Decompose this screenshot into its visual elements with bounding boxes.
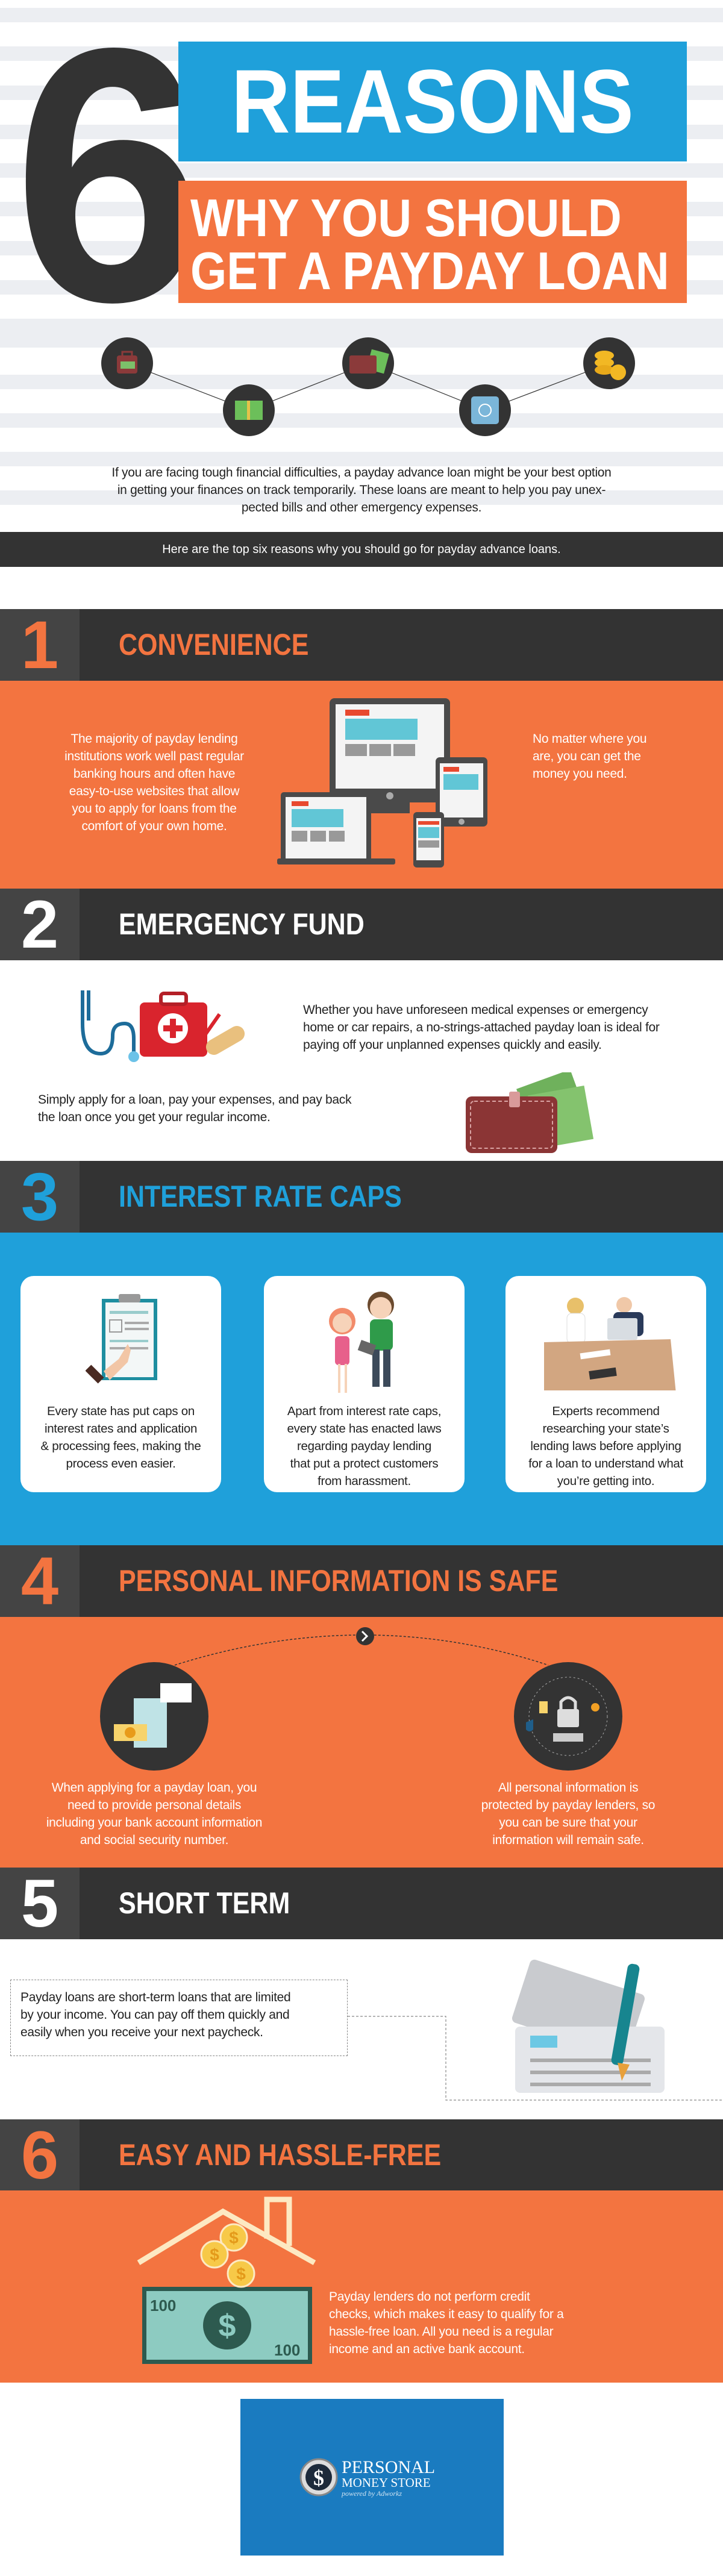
icon: devices	[277, 698, 487, 868]
logo text: MONEY STORE	[342, 2475, 431, 2490]
card 3: experts: Experts recommend	[552, 1404, 660, 1418]
intro paragraph: pected bills and other emergency expenses.	[242, 501, 481, 514]
text: no credit checks	[329, 2290, 564, 2356]
card 2: laws: Apart from interest rate caps,	[287, 1404, 441, 1418]
icon circle: bank details	[100, 1662, 208, 1771]
card 1: caps: Every state has put caps on	[47, 1404, 195, 1418]
card 3: experts: for a loan to understand what	[528, 1457, 683, 1471]
arrow: dashed arc with chevron	[175, 1627, 548, 1666]
text box: short-term loans: easily when you receive your next paycheck.	[20, 2025, 263, 2039]
section 5 header: short term	[0, 1868, 723, 1939]
icon row: money icons connected	[101, 337, 635, 436]
section 2 header: emergency fund: EMERGENCY FUND	[119, 907, 365, 941]
title: reasons: REASONS	[231, 51, 634, 152]
text: left: When applying for a payday loan, you	[52, 1781, 257, 1795]
section 2 panel	[0, 960, 723, 1160]
text: left	[64, 732, 244, 833]
text box: short-term loans	[10, 1980, 348, 2056]
section 1 header: convenience	[0, 609, 723, 681]
section 3 header: interest rate caps	[0, 1161, 723, 1233]
text: left: and social security number.	[80, 1833, 228, 1847]
text: left: need to provide personal details	[67, 1798, 241, 1812]
card 3: experts: you’re getting into.	[557, 1474, 654, 1488]
card 1: caps: process even easier.	[66, 1457, 176, 1471]
text: right: No matter where you	[533, 732, 646, 746]
text: medical expenses	[303, 1003, 660, 1052]
card 2: laws	[264, 1276, 465, 1492]
text: left: institutions work well past regular	[64, 749, 244, 763]
icon circle: security lock	[514, 1662, 622, 1771]
intro dark bar: Here are the top six reasons why you should go for payday advance loans.	[162, 543, 561, 556]
section 2 header: emergency fund: 2	[21, 887, 58, 962]
card 2: laws: from harassment.	[318, 1474, 411, 1488]
section 1 header: convenience: 1	[21, 607, 58, 683]
icon: house with money: $	[210, 2245, 219, 2264]
section 4 header: personal information is safe: 4	[21, 1543, 58, 1619]
section 6 header: easy and hassle-free: EASY AND HASSLE-FREE	[119, 2138, 441, 2172]
section 1 panel	[0, 681, 723, 889]
icon: house with money	[137, 2196, 316, 2364]
section 1 header: convenience: CONVENIENCE	[119, 628, 308, 661]
icon: clipboard	[86, 1294, 157, 1383]
text: left	[46, 1781, 262, 1847]
text: medical expenses: Whether you have unforeseen medical expenses or emergency	[303, 1003, 648, 1017]
text: right: money you need.	[533, 767, 627, 781]
logo text: PERSONAL	[342, 2457, 435, 2477]
icon: wallet with cash	[466, 1072, 593, 1153]
text: simply apply: the loan once you get your regular income.	[38, 1110, 270, 1124]
icon: house with money: $	[229, 2228, 239, 2247]
text: right: are, you can get the	[533, 749, 641, 763]
text: right: you can be sure that your	[499, 1816, 637, 1830]
icon: house with money: 100	[150, 2296, 176, 2315]
text: no credit checks: hassle-free loan. All you need is a regular	[329, 2325, 553, 2339]
card 3: experts	[505, 1276, 706, 1492]
logo: personal money store	[240, 2399, 504, 2556]
text: simply apply: Simply apply for a loan, pay your expenses, and pay back	[38, 1093, 351, 1107]
intro paragraph: in getting your finances on track temporarily. These loans are meant to help you pay unex-	[117, 483, 606, 497]
icon: cheque and pen	[512, 1959, 665, 2093]
text: left: banking hours and often have	[74, 767, 235, 781]
section 6 panel	[0, 2190, 723, 2383]
section 5 header: short term: 5	[21, 1866, 58, 1941]
text: simply apply	[38, 1093, 352, 1124]
section 3 header: interest rate caps: INTEREST RATE CAPS	[119, 1180, 402, 1213]
icon: medical kit	[81, 990, 245, 1062]
text box: short-term loans: by your income. You can pay off them quickly and	[20, 2008, 289, 2022]
section 2 header: emergency fund	[0, 889, 723, 960]
text: right	[481, 1781, 655, 1847]
text: left: comfort of your own home.	[81, 819, 227, 833]
section 5 panel	[0, 1939, 723, 2119]
text: right: information will remain safe.	[492, 1833, 644, 1847]
section 5 header: short term: SHORT TERM	[119, 1886, 290, 1920]
title: why you should get a payday loan	[178, 181, 687, 303]
logo text	[341, 2457, 435, 2498]
text: medical expenses: home or car repairs, a no-strings-attached payday loan is ideal for	[303, 1021, 660, 1034]
text: left: easy-to-use websites that allow	[69, 784, 239, 798]
logo icon: $	[313, 2466, 324, 2490]
section 4 header: personal information is safe	[0, 1545, 723, 1617]
card 2: laws: regarding payday lending	[297, 1439, 431, 1453]
text: no credit checks: checks, which makes it easy to qualify for a	[329, 2307, 563, 2321]
text: no credit checks: Payday lenders do not perform credit	[329, 2290, 530, 2304]
icon: house with money: 100	[274, 2341, 300, 2359]
text: medical expenses: paying off your unplanned expenses quickly and easily.	[303, 1038, 602, 1052]
intro dark bar	[0, 532, 723, 567]
intro paragraph: If you are facing tough financial difficulties, a payday advance loan might be your best option	[111, 466, 612, 480]
text: right: protected by payday lenders, so	[481, 1798, 655, 1812]
section 3 header: interest rate caps: 3	[21, 1159, 58, 1234]
text: no credit checks: income and an active bank account.	[329, 2342, 525, 2356]
section 4 panel	[0, 1617, 723, 1868]
card 3: experts: lending laws before applying	[530, 1439, 681, 1453]
title: reasons	[178, 42, 687, 161]
text: left: including your bank account information	[46, 1816, 262, 1830]
text box: short-term loans: Payday loans are short-term loans that are limited	[20, 1990, 290, 2004]
text: right: All personal information is	[498, 1781, 638, 1795]
title: why you should get a payday loan: GET A PAYDAY LOAN	[190, 241, 669, 301]
logo icon	[300, 2458, 337, 2496]
section 3 panel	[0, 1233, 723, 1545]
card 2: laws: that put a protect customers	[290, 1457, 438, 1471]
section 6 header: easy and hassle-free	[0, 2119, 723, 2191]
text: left: The majority of payday lending	[71, 732, 237, 746]
text: left: you to apply for loans from the	[72, 802, 237, 816]
icon: house with money: $	[236, 2265, 246, 2283]
card 1: caps: interest rates and application	[45, 1422, 197, 1436]
card 1: caps: & processing fees, making the	[41, 1439, 201, 1453]
section 6 header: easy and hassle-free: 6	[21, 2118, 58, 2193]
card 2: laws: every state has enacted laws	[287, 1422, 441, 1436]
icon: house with money: $	[219, 2309, 236, 2343]
section 4 header: personal information is safe: PERSONAL INFORMATION IS SAFE	[119, 1564, 558, 1598]
title: why you should get a payday loan: WHY YOU SHOULD	[190, 188, 622, 248]
dashed connector	[348, 2016, 722, 2101]
card 1: caps	[20, 1276, 221, 1492]
icon: couple	[329, 1292, 394, 1393]
logo text: powered by Adworkz	[342, 2489, 402, 2498]
text: right	[533, 732, 646, 781]
header background stripes	[0, 8, 723, 505]
card 3: experts: researching your state’s	[542, 1422, 669, 1436]
intro paragraph	[111, 466, 612, 514]
icon: meeting table	[544, 1297, 676, 1390]
